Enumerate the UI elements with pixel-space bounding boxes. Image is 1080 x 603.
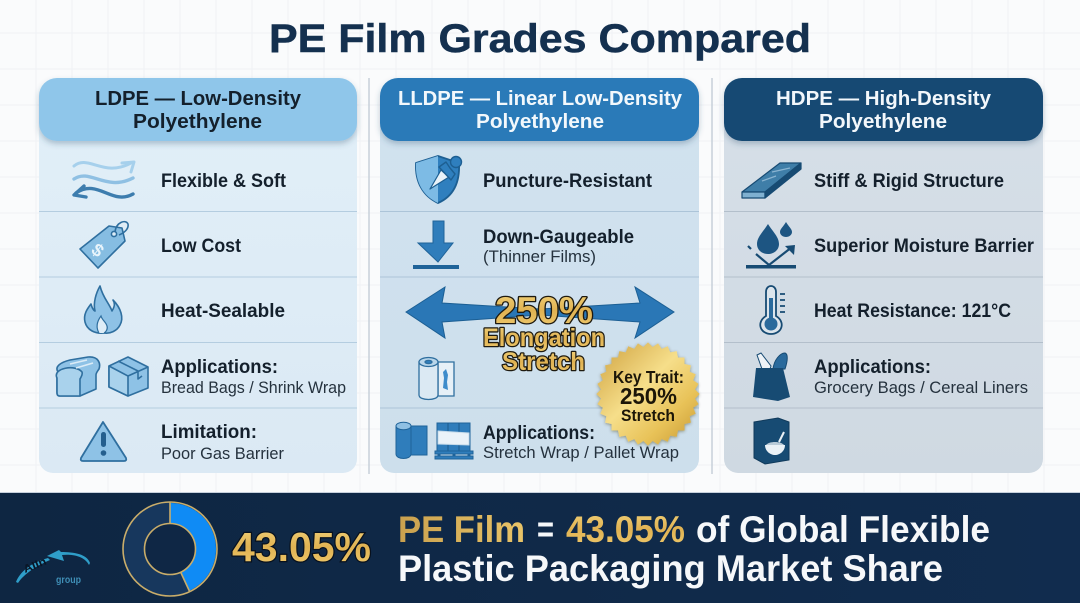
logo: group xyxy=(56,574,81,586)
label: flexible: Flexible & Soft xyxy=(161,171,287,192)
panel: LLDPE xyxy=(380,78,704,473)
icon: thermometer xyxy=(760,286,785,334)
LDPE heading xyxy=(39,78,357,141)
label: applications: Applications: xyxy=(161,357,278,378)
label: heat resistance: Heat Resistance: 121°C xyxy=(814,301,1011,322)
label: applications: Applications: xyxy=(483,423,595,444)
label: puncture: Puncture-Resistant xyxy=(483,171,653,192)
label: applications: Applications: xyxy=(814,357,931,378)
icon: price tag: $ xyxy=(87,239,108,261)
icon: cereal box xyxy=(754,418,789,464)
icon: flexible waves xyxy=(74,162,134,197)
icon: moisture barrier xyxy=(746,222,796,268)
icon: flame xyxy=(85,286,122,333)
logo xyxy=(16,550,90,586)
callout: key trait badge: 250% xyxy=(620,383,677,409)
label: down gauge xyxy=(483,227,634,266)
LLDPE heading xyxy=(380,78,699,141)
label: moisture: Superior Moisture Barrier xyxy=(814,236,1035,257)
icon: film roll xyxy=(419,358,454,400)
icon: grocery bag xyxy=(753,353,790,401)
icon: bread and box xyxy=(56,357,148,396)
donut chart xyxy=(123,502,217,596)
icon: shield with pin xyxy=(416,156,462,203)
label: applications xyxy=(161,357,346,397)
icon: stretch arrow xyxy=(406,287,674,338)
label: applications xyxy=(814,357,1028,397)
icon: stretch wrap and pallet xyxy=(396,422,473,459)
label: limitation: Poor Gas Barrier xyxy=(161,445,284,463)
market share statement: PE Film xyxy=(398,509,525,550)
label: applications: Grocery Bags / Cereal Liners xyxy=(814,379,1028,397)
callout: key trait badge: Stretch xyxy=(621,406,675,425)
label: down gauge: (Thinner Films) xyxy=(483,248,596,266)
panel: HDPE xyxy=(724,78,1043,473)
callout: 250% elongation: Stretch xyxy=(502,348,585,376)
label: low cost: Low Cost xyxy=(161,236,242,257)
label: heat sealable: Heat-Sealable xyxy=(161,301,285,322)
icon: warning xyxy=(81,422,126,461)
market share statement: = xyxy=(537,509,554,550)
LDPE heading: LDPE — Low-Density xyxy=(95,87,302,110)
icon: price tag xyxy=(80,222,128,268)
callout: 250% elongation: 250% xyxy=(495,290,593,331)
callout: key trait badge xyxy=(595,342,701,448)
callout: key trait badge: Key Trait: xyxy=(613,367,684,387)
label: applications: Stretch Wrap / Pallet Wrap xyxy=(483,444,679,462)
label: applications xyxy=(483,423,679,462)
LLDPE heading: LLDPE — Linear Low-Density xyxy=(398,87,683,110)
panel: LDPE xyxy=(39,78,357,473)
donut value: 43.05% xyxy=(232,524,371,570)
footer banner xyxy=(0,492,1080,603)
title: PE Film Grades Compared xyxy=(269,17,811,61)
logo: AIIn xyxy=(22,556,49,576)
HDPE heading: Polyethylene xyxy=(819,110,947,133)
market share statement: 43.05% xyxy=(566,509,685,550)
HDPE heading xyxy=(724,78,1043,141)
LLDPE heading: Polyethylene xyxy=(476,110,604,133)
LDPE heading: Polyethylene xyxy=(133,110,262,133)
HDPE heading: HDPE — High-Density xyxy=(776,87,992,110)
label: down gauge: Down-Gaugeable xyxy=(483,227,634,248)
label: stiff: Stiff & Rigid Structure xyxy=(814,171,1004,192)
icon: plank xyxy=(742,163,801,198)
label: applications: Bread Bags / Shrink Wrap xyxy=(161,379,346,397)
label: limitation xyxy=(161,422,284,463)
callout: 250% elongation xyxy=(483,290,605,376)
market share statement: of Global Flexible xyxy=(696,509,990,550)
icon: down arrow xyxy=(413,221,459,269)
label: limitation: Limitation: xyxy=(161,422,257,443)
callout: 250% elongation: Elongation xyxy=(483,324,605,352)
market share statement xyxy=(398,509,990,589)
market share statement: Plastic Packaging Market Share xyxy=(398,548,943,589)
